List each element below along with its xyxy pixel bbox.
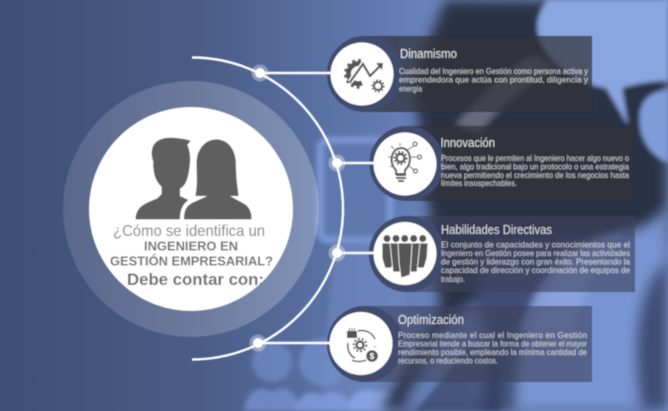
icon: optimization cycle: $ — [370, 352, 375, 361]
heading Dinamismo: Dinamismo — [400, 47, 457, 61]
icon: two people silhouettes — [136, 138, 252, 219]
panel: Optimización — [250, 306, 592, 382]
text Habilidades Directivas: capacidad de dirección y coordinación de equipos de — [441, 266, 630, 275]
text Innovación: límites insospechables. — [441, 179, 517, 188]
text Dinamismo: Cualidad del Ingeniero en Gestión como persona activa y — [399, 67, 589, 76]
text Optimización: Proceso mediante el cual el Ingeniero en Gestión — [398, 331, 587, 340]
panel: Habilidades Directivas — [328, 216, 635, 292]
central heading text — [110, 223, 273, 289]
panel cap Habilidades Directivas — [369, 216, 445, 292]
heading Optimización: Optimización — [398, 313, 464, 327]
connector Habilidades Directivas — [328, 244, 375, 262]
text Optimización — [398, 331, 587, 366]
central circle ring — [63, 81, 319, 337]
text Optimización: Empresarial tiende a buscar la forma de obtener el mayor — [398, 340, 587, 348]
icon: gears with rising arrow — [330, 42, 394, 106]
heading Innovación: Innovación — [440, 136, 495, 150]
panel cap Innovación — [370, 126, 444, 201]
central heading text: GESTIÓN EMPRESARIAL? — [110, 254, 273, 268]
central white circle — [89, 107, 293, 311]
connector Dinamismo — [252, 64, 332, 82]
panel: Dinamismo — [252, 36, 592, 112]
text Habilidades Directivas — [441, 240, 630, 284]
text Optimización: rendimiento posible, empleando la mínima cantidad de — [398, 348, 587, 357]
connector Optimización — [250, 334, 332, 352]
central heading text: INGENIERO EN — [144, 240, 238, 254]
text Habilidades Directivas: trabajo. — [441, 275, 465, 284]
panel: Innovación — [328, 126, 634, 201]
panel cap Optimización — [327, 306, 403, 382]
text Dinamismo: emprendedora que actúa con prontitud, diligencia y — [399, 76, 589, 84]
connector Innovación — [328, 154, 375, 172]
text Innovación: Procesos que le permiten al Ingeniero hacer algo nuevo o — [441, 154, 629, 163]
text Innovación: nueva permitiendo el crecimiento de los negocios hasta — [441, 171, 629, 180]
heading Habilidades Directivas: Habilidades Directivas — [441, 223, 552, 237]
icon: light bulb with gear — [374, 132, 436, 196]
text Innovación: bien, algo tradicional bajo un protocolo o una estrategia — [441, 162, 629, 172]
central heading text: ¿Cómo se identifica un — [113, 223, 265, 240]
text Dinamismo — [399, 67, 589, 94]
text Habilidades Directivas: Ingeniero en Gestión posee para realizar las actividades — [441, 249, 630, 258]
text Innovación — [441, 154, 629, 188]
text Habilidades Directivas: El conjunto de capacidades y conocimientos que el — [441, 240, 630, 250]
icon: optimization cycle — [330, 312, 392, 375]
text Optimización: recursos, o reduciendo costos. — [398, 356, 498, 366]
main content — [63, 36, 635, 382]
panel cap Dinamismo — [327, 36, 403, 112]
text Habilidades Directivas: de gestión y liderazgo con gran éxito. Presentando la — [441, 258, 630, 266]
text Dinamismo: energía — [399, 84, 422, 94]
connector arc — [192, 58, 343, 360]
central heading text: Debe contar con: — [127, 271, 264, 289]
icon: group of people — [374, 222, 436, 285]
